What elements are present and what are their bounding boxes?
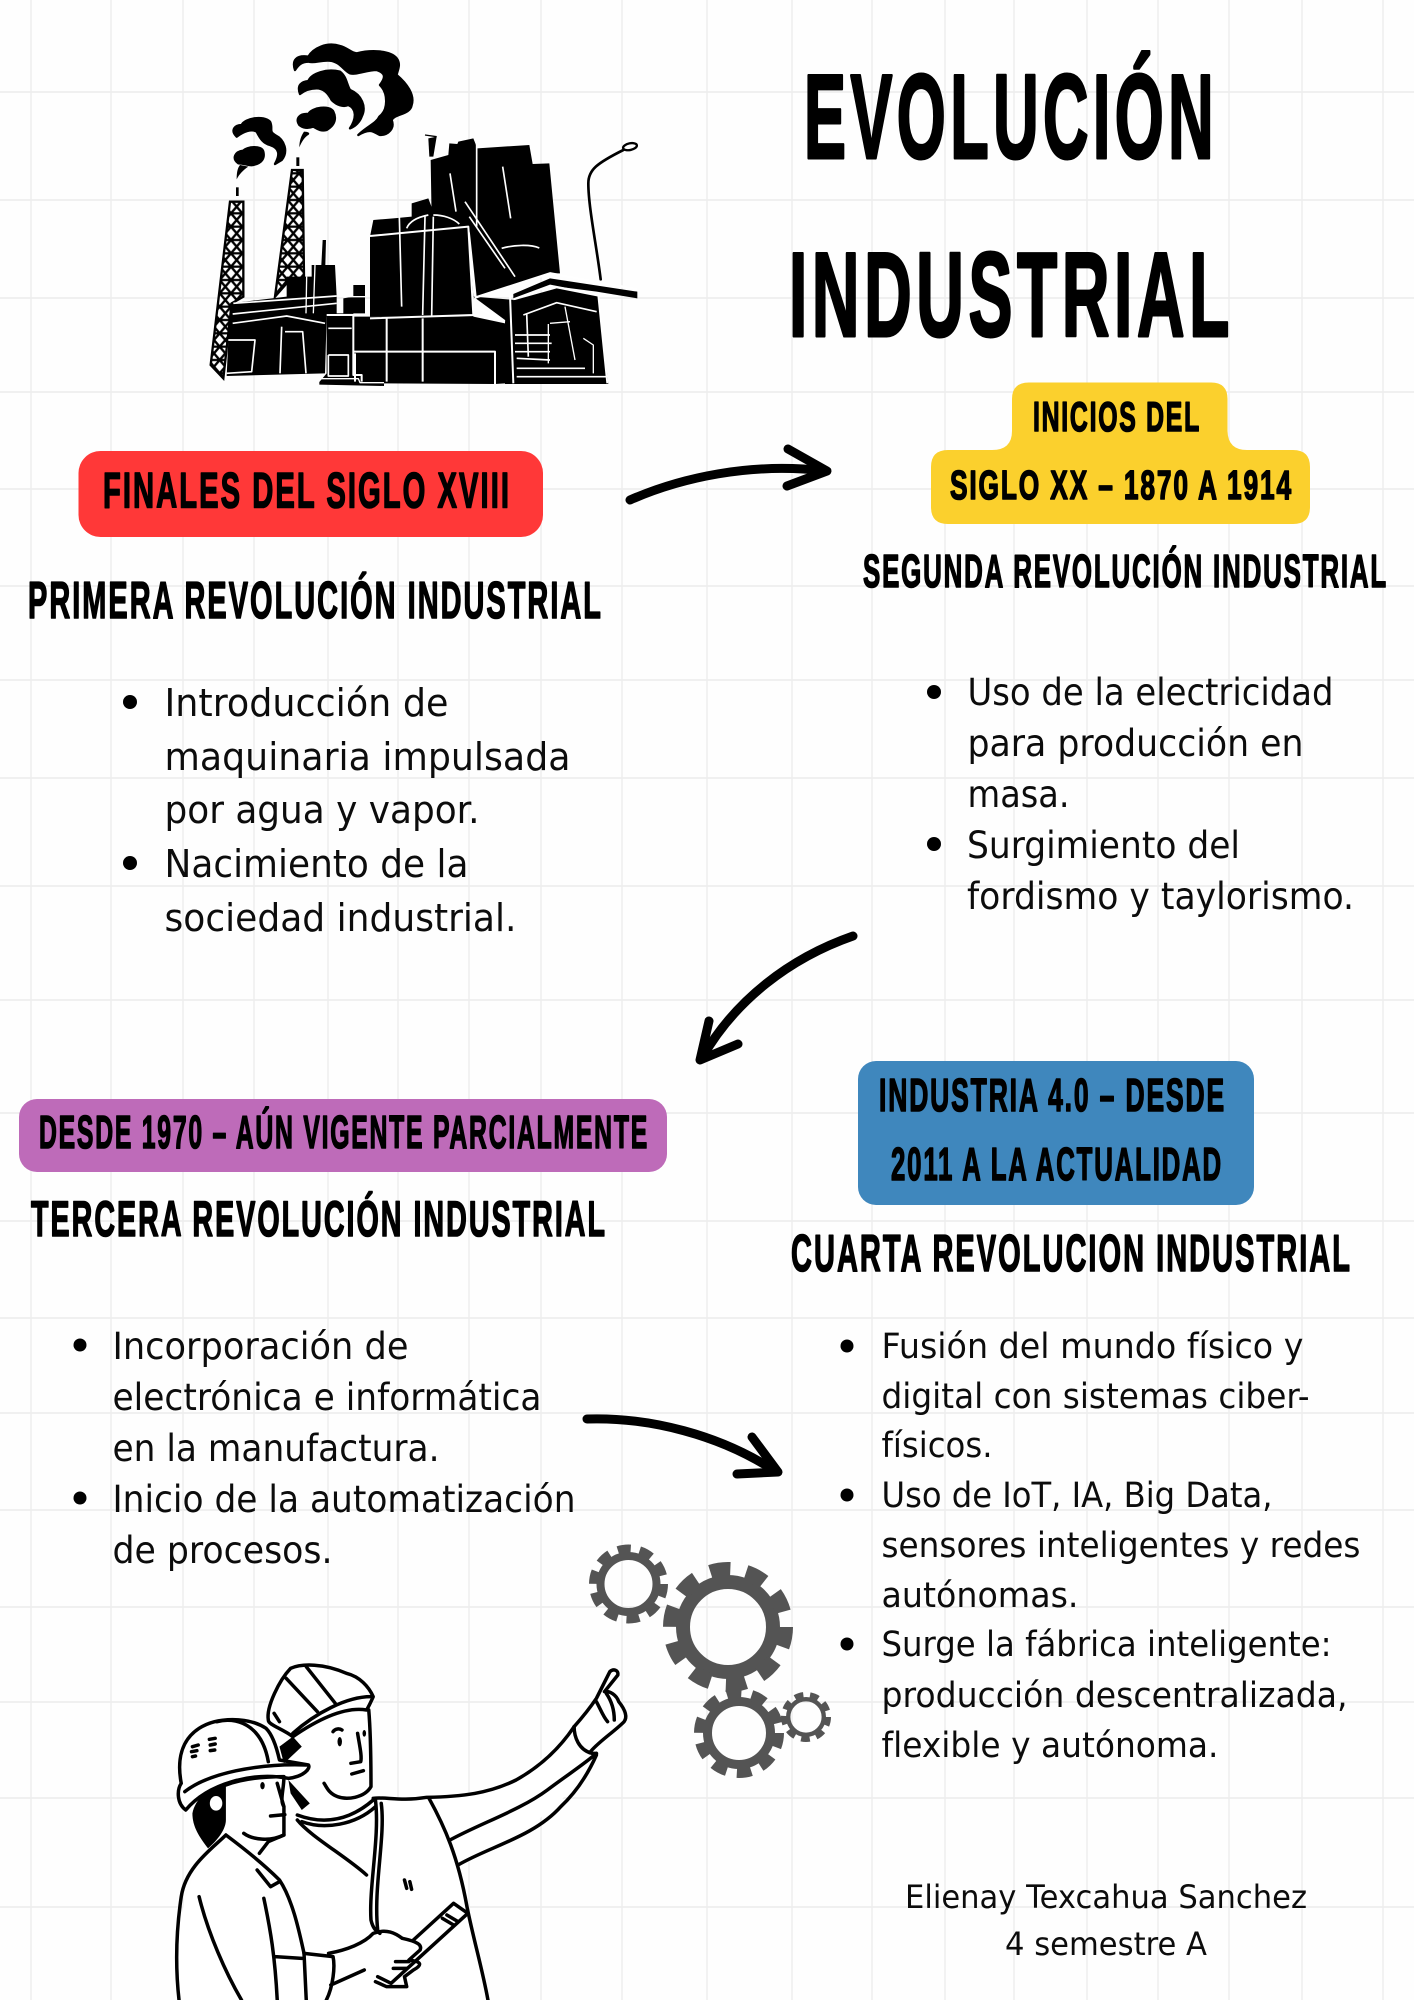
bullet list: tercera: de procesos.: [112, 1529, 332, 1572]
bullet list: primera: sociedad industrial.: [164, 896, 516, 940]
bullet list: segunda: [927, 671, 1354, 918]
author credit: 4 semestre A: [1005, 1925, 1207, 1963]
panel: cuarta revolución: [791, 1061, 1360, 1766]
bullet list: segunda: Uso de la electricidad: [968, 671, 1334, 714]
date pill: red: [78, 451, 543, 537]
panel: segunda revolución: [863, 382, 1388, 918]
bullet list: tercera: [74, 1325, 576, 1572]
bullet list: cuarta: autónomas.: [882, 1576, 1078, 1616]
date pill: yellow: [931, 382, 1310, 524]
date pill: purple: [19, 1099, 667, 1172]
date pill: red: FINALES DEL SIGLO XVIII: [103, 462, 511, 518]
bullet list: cuarta: Uso de IoT, IA, Big Data,: [882, 1476, 1272, 1516]
bullet list: cuarta: [840, 1327, 1360, 1766]
author credit: Elienay Texcahua Sanchez: [905, 1878, 1307, 1916]
arrow: segunda to tercera: [700, 936, 853, 1060]
bullet list: tercera: Incorporación de: [112, 1325, 408, 1368]
title: [789, 50, 1234, 362]
bullet list: cuarta: Fusión del mundo físico y: [882, 1327, 1304, 1367]
bullet list: cuarta: producción descentralizada,: [882, 1676, 1348, 1716]
bullet list: segunda: masa.: [968, 773, 1070, 816]
bullet list: segunda: Surgimiento del: [967, 824, 1240, 867]
bullet list: cuarta: físicos.: [882, 1426, 992, 1466]
bullet list: cuarta: Surge la fábrica inteligente:: [882, 1625, 1332, 1665]
illustration: factory silhouette: [211, 45, 638, 386]
bullet list: cuarta: flexible y autónoma.: [882, 1726, 1218, 1766]
date pill: purple: DESDE 1970 – AÚN VIGENTE PARCIALMENTE: [39, 1106, 649, 1158]
icon: gears: [594, 1549, 828, 1772]
bullet list: primera: Introducción de: [164, 681, 448, 725]
bullet list: cuarta: sensores inteligentes y redes: [882, 1526, 1360, 1566]
heading: primera revolución industrial: PRIMERA REVOLUCIÓN INDUSTRIAL: [28, 572, 603, 630]
bullet list: cuarta: digital con sistemas ciber-: [882, 1377, 1310, 1417]
bullet list: primera: Nacimiento de la: [164, 842, 468, 886]
bullet list: tercera: Inicio de la automatización: [112, 1478, 576, 1521]
date pill: yellow: INICIOS DEL: [1033, 393, 1201, 440]
bullet list: primera: por agua y vapor.: [164, 788, 480, 832]
author credit: [905, 1878, 1307, 1963]
bullet list: primera: [123, 681, 570, 940]
bullet list: primera: maquinaria impulsada: [164, 735, 570, 779]
date pill: blue: [858, 1061, 1254, 1205]
heading: tercera revolución industrial: TERCERA REVOLUCIÓN INDUSTRIAL: [31, 1191, 607, 1247]
bullet list: segunda: fordismo y taylorismo.: [967, 875, 1354, 918]
arrow: primera to segunda: [630, 449, 827, 500]
panel: tercera revolución: [19, 1099, 667, 1572]
bullet list: tercera: en la manufactura.: [112, 1427, 440, 1470]
illustration: two workers pointing: [176, 1665, 626, 2000]
arrow: tercera to cuarta: [587, 1419, 778, 1474]
bullet list: segunda: para producción en: [968, 722, 1304, 765]
panel: primera revolución: [28, 451, 603, 940]
bullet list: tercera: electrónica e informática: [112, 1376, 542, 1419]
